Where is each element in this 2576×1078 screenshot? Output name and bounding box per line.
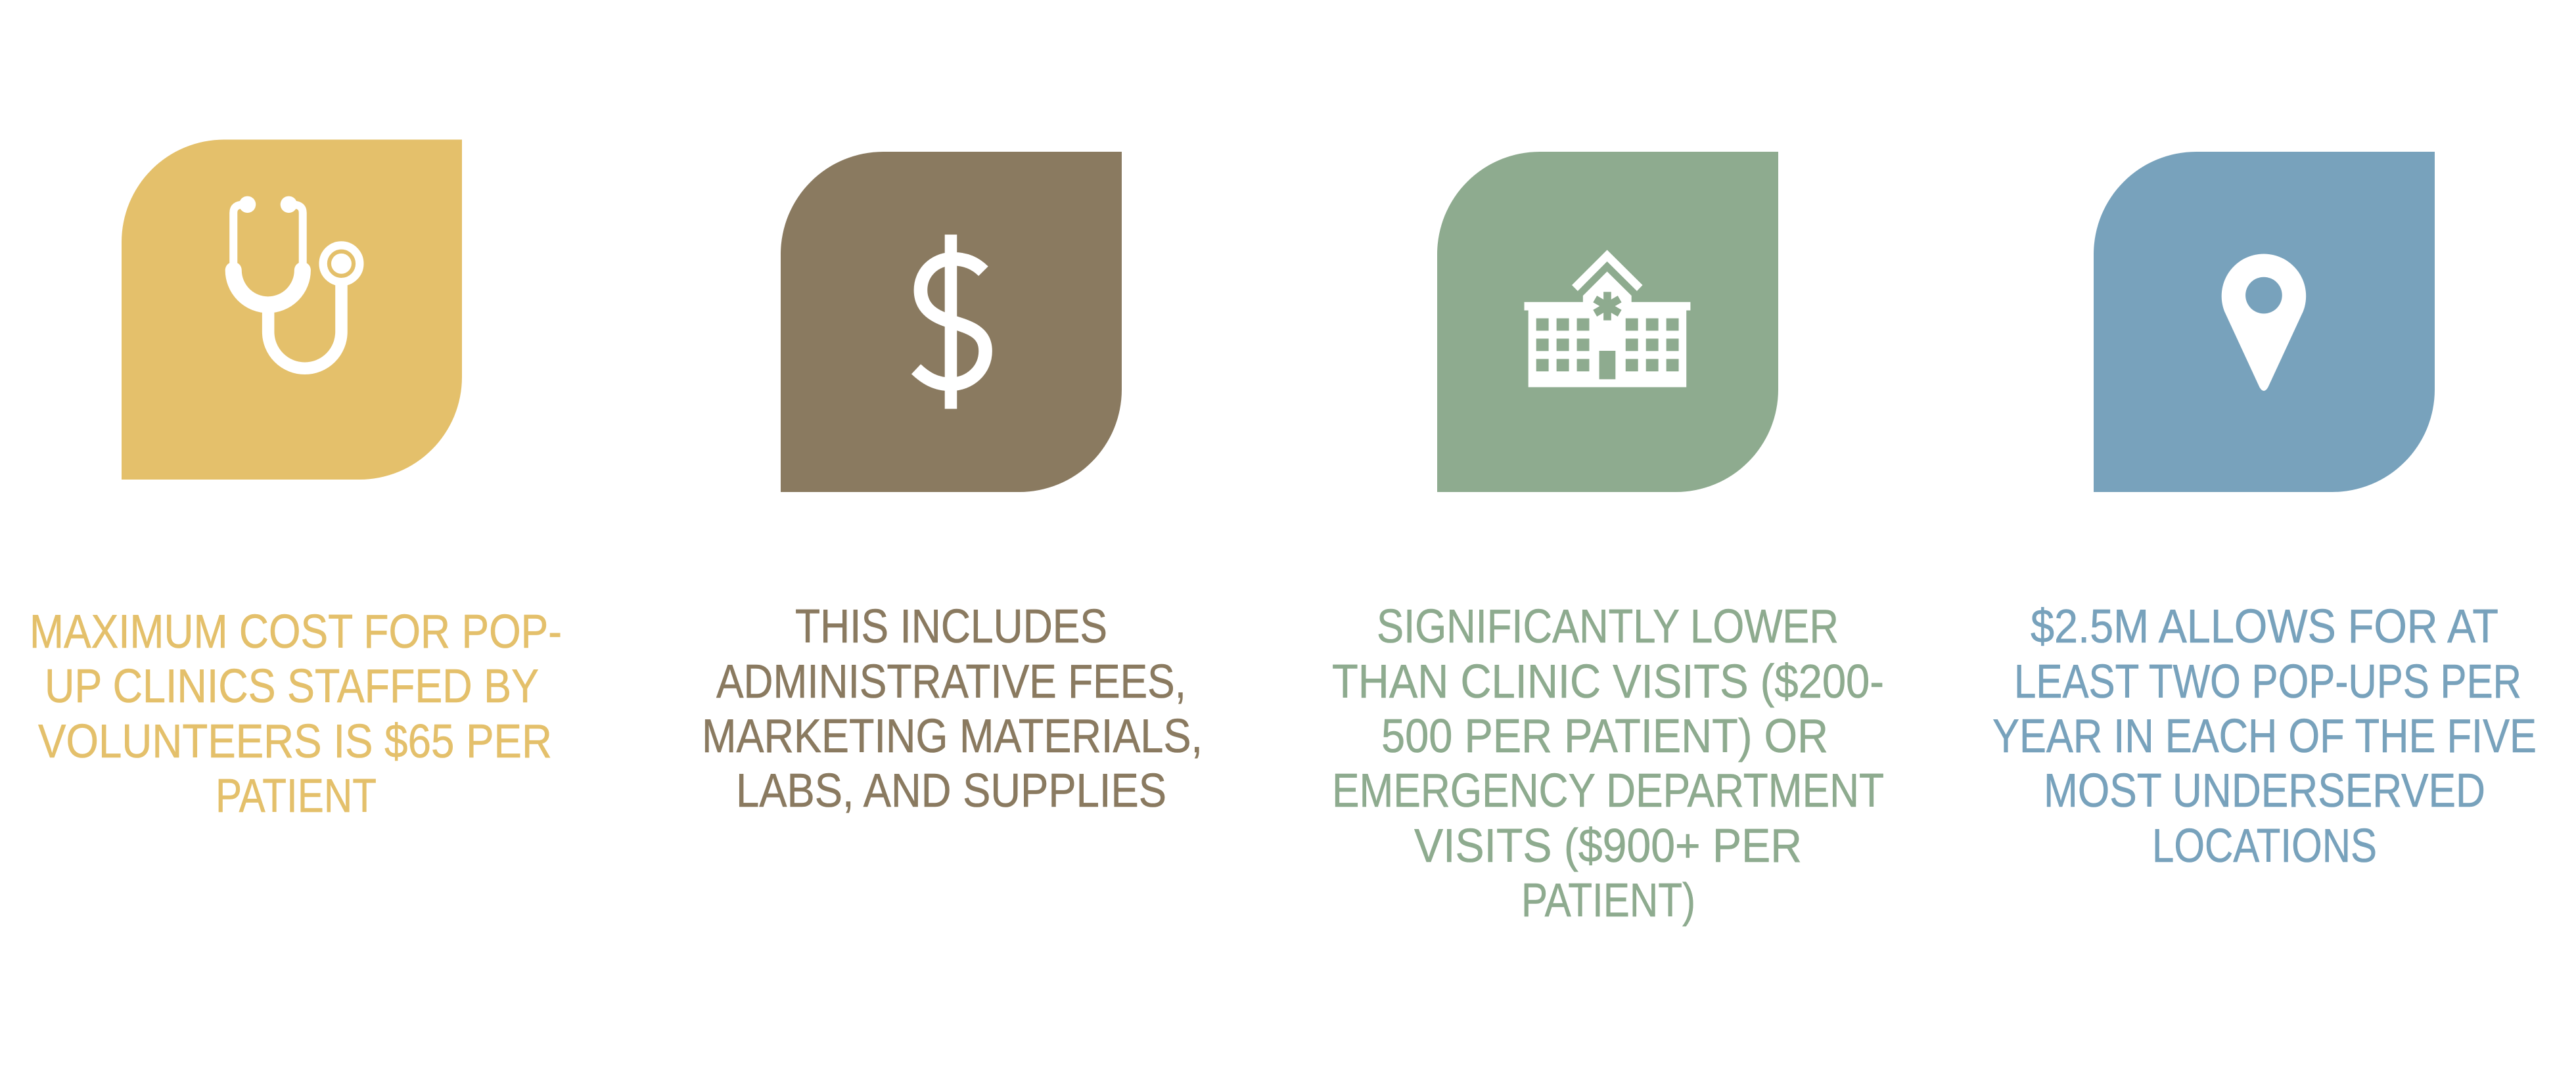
tile: blue leaf shape xyxy=(2094,152,2435,492)
panel: maximum cost xyxy=(30,139,562,822)
text: included costs description: MARKETING MATERIALS, xyxy=(702,710,1203,763)
text: included costs description: THIS INCLUDES xyxy=(795,600,1107,653)
text: maximum cost description: MAXIMUM COST FOR POP- xyxy=(30,606,562,658)
text: included costs description: LABS, AND SUPPLIES xyxy=(736,765,1166,817)
text: cost comparison description: SIGNIFICANTLY LOWER xyxy=(1377,600,1839,653)
text: included costs description: ADMINISTRATIVE FEES, xyxy=(716,656,1186,708)
text: cost comparison description: THAN CLINIC VISITS ($200- xyxy=(1332,656,1884,708)
tile: gold leaf shape xyxy=(122,139,462,480)
text: cost comparison description: EMERGENCY DEPARTMENT xyxy=(1332,765,1884,817)
icon: hospital building xyxy=(1525,250,1690,387)
panel: included costs xyxy=(702,152,1203,817)
text: cost comparison description xyxy=(1332,600,1884,927)
text: cost comparison description: 500 PER PATIENT) OR xyxy=(1381,710,1828,763)
icon: stethoscope xyxy=(233,196,359,369)
icon: map pin xyxy=(2222,254,2306,391)
text: locations description: LOCATIONS xyxy=(2152,820,2377,872)
text: included costs description xyxy=(702,600,1203,817)
text: maximum cost description: UP CLINICS STAFFED BY xyxy=(45,660,539,713)
text: locations description xyxy=(1992,600,2537,872)
text: maximum cost description xyxy=(30,606,562,822)
text: cost comparison description: PATIENT) xyxy=(1521,874,1695,927)
panel: locations xyxy=(1992,152,2537,872)
text: locations description: $2.5M ALLOWS FOR AT xyxy=(2031,600,2498,653)
tile: brown leaf shape xyxy=(781,152,1122,492)
text: cost comparison description: VISITS ($900+ PER xyxy=(1414,820,1802,872)
panel: cost comparison xyxy=(1332,152,1884,927)
text: locations description: MOST UNDERSERVED xyxy=(2044,765,2485,817)
text: maximum cost description: PATIENT xyxy=(216,770,377,822)
text: maximum cost description: VOLUNTEERS IS $65 PER xyxy=(38,715,552,768)
icon: dollar sign xyxy=(916,235,986,409)
tile: green leaf shape xyxy=(1437,152,1778,492)
